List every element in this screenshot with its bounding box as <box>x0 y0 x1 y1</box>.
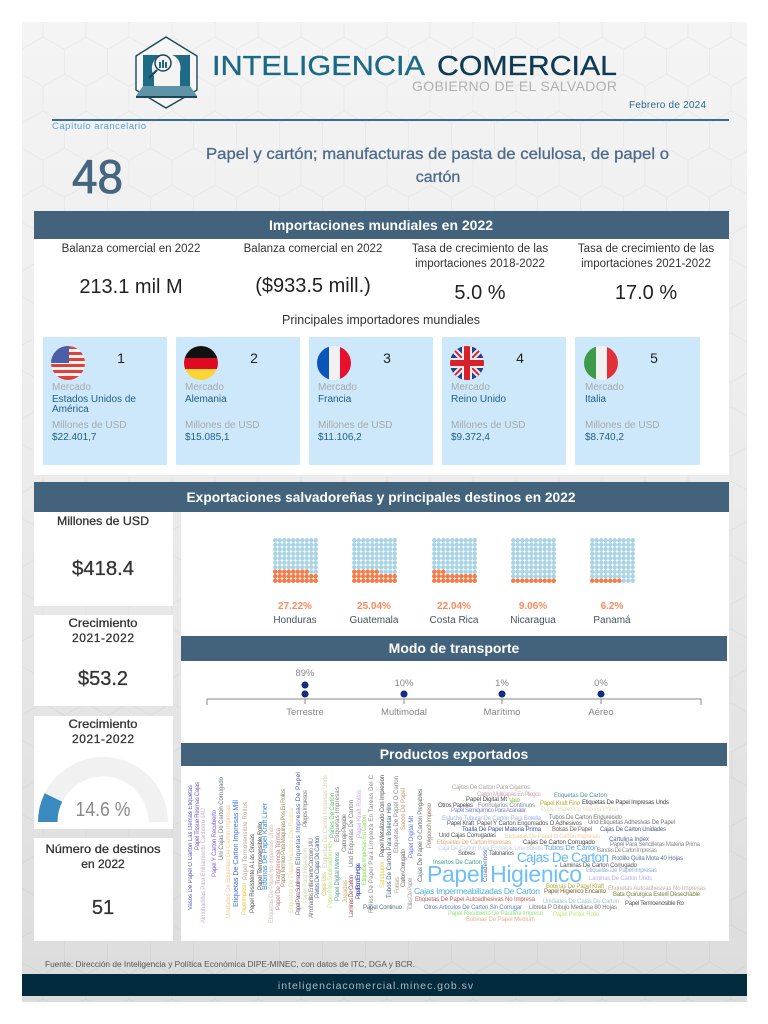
word cloud: productos exportados: Papel Termico Para Maquinas Pos En Rollos <box>281 789 287 887</box>
KPI card: crecimiento $53.2: $53.2 <box>78 668 128 690</box>
card: Italia: Millones de USD <box>585 420 659 431</box>
card: Alemania: $15.085,1 <box>185 432 230 443</box>
card: Estados Unidos: Mercado <box>52 382 91 393</box>
word cloud: productos exportados: Papel Printer Rollo <box>553 912 600 918</box>
word cloud: productos exportados: Papel Para Sencilletas Materia Prima <box>610 842 701 848</box>
card: Francia <box>309 337 433 465</box>
word cloud: productos exportados: Etiquetas De Papel Impresas Unds <box>582 800 669 806</box>
waffle chart: Panamá: 6.2% <box>601 601 624 612</box>
word cloud: productos exportados: Bobinas De Papel Kraft <box>546 884 604 890</box>
word cloud: productos exportados: Papel Semiquimico Para Acanalar <box>451 808 526 814</box>
word cloud: productos exportados: Pliegos Impresos <box>303 790 309 827</box>
dot plot: modo de transporte: 89% <box>295 668 315 679</box>
word cloud: productos exportados: Vaso <box>509 798 521 804</box>
card: Reino Unido: Millones de USD <box>451 420 525 431</box>
word cloud: productos exportados: Carton Corrugado <box>401 848 407 887</box>
word cloud: productos exportados: Estuche Tubular De Carton Para Botella <box>442 816 542 822</box>
card: Estados Unidos: $22.401,7 <box>52 432 97 443</box>
word cloud: productos exportados: Bandas De Carton Impresas <box>597 848 657 854</box>
KPI card: millones de USD: $418.4 <box>72 558 134 580</box>
dot plot: modo de transporte: 10% <box>394 678 414 689</box>
word cloud: productos exportados: Papel Higienico Materia Prima <box>541 807 619 813</box>
KPI: tasa de crecimiento 2021-2022: Tasa de crecimiento de las <box>578 243 714 255</box>
word cloud: productos exportados: Laminas De Carton <box>349 875 355 917</box>
word cloud: productos exportados: Und Etiquetas De Carton <box>349 800 355 867</box>
word cloud: productos exportados: Unidades De Cajas De Carton <box>543 899 619 905</box>
heading band: modo de transporte: Modo de transporte <box>389 640 520 656</box>
KPI card: crecimiento gauge: Crecimiento <box>68 717 138 731</box>
word cloud: productos exportados: Cajas De Carton <box>517 850 609 865</box>
waffle chart: Panamá <box>590 538 635 626</box>
subheading: principales importadores: Principales importadores mundiales <box>282 313 480 327</box>
word cloud: productos exportados: Papel Higienico Encanto <box>544 889 607 895</box>
word cloud: productos exportados: Almohadillas Para Enfriamiento Cachorro 14U <box>201 808 207 923</box>
KPI card: número de destinos <box>34 838 173 941</box>
word cloud: productos exportados: Cajas De Papel O Carton Plegables <box>418 789 424 882</box>
card: Estados Unidos: 1 <box>117 350 125 366</box>
KPI: tasa de crecimiento 2018-2022 <box>412 243 548 304</box>
waffle chart: Panamá: Panamá <box>593 615 631 626</box>
word cloud: productos exportados: Und Cajas Corrugadas <box>439 833 496 839</box>
word cloud: productos exportados: Papel Para Impresion <box>303 848 309 903</box>
word cloud: productos exportados: Papel Tissue Resmas Cajas <box>195 782 201 850</box>
title: Inteligencia Comercial: INTELIGENCIA <box>212 50 425 81</box>
word cloud: productos exportados: Papel Termosensible Rollos <box>243 802 249 880</box>
waffle chart: Costa Rica: 22.04% <box>437 601 471 612</box>
card: Alemania: Alemania <box>185 394 227 405</box>
icon: flag Italy <box>584 346 619 380</box>
word cloud: productos exportados: Etiquetas De Papel Autoadhesivas No Impresa <box>415 897 536 903</box>
word cloud: productos exportados: Unidades De Etiquetas De Carton Impresas <box>226 805 232 918</box>
word cloud: productos exportados: Otros Articulos De Carton Sin Corrugar <box>424 905 522 911</box>
word cloud: productos exportados: Rodillo Quita Mota 40 Hojas <box>612 856 683 862</box>
word cloud: productos exportados: Papel Termosensible Rollo <box>258 821 264 890</box>
waffle chart: Guatemala: Guatemala <box>350 615 399 626</box>
KPI card: crecimiento $53.2: Crecimiento <box>68 616 138 630</box>
word cloud: productos exportados: Etiquetas De Carton Impresas Unds <box>323 775 329 868</box>
chapter title: Papel y cartón; manufacturas de pasta de celulosa, de papel o <box>206 146 669 163</box>
word cloud: productos exportados: Cajas Impermeabilizadas De Carton <box>414 886 540 896</box>
panel: destinos y productos <box>181 512 729 941</box>
waffle chart: Nicaragua: 9.06% <box>519 601 547 612</box>
word cloud: productos exportados: Papel Digital Metros <box>335 852 341 901</box>
word cloud: productos exportados: Partes De Carton <box>330 793 336 838</box>
icon: flag Germany <box>184 346 218 381</box>
word cloud: productos exportados: Etiquetas De Papel No Impresas Unds <box>269 825 275 923</box>
KPI: tasa de crecimiento 2018-2022: 5.0 % <box>454 282 506 304</box>
word cloud: productos exportados: Cajas De Carton Corrugado <box>523 840 596 846</box>
dot plot: modo de transporte: Marítimo <box>484 707 520 718</box>
word cloud: productos exportados: Cajas De Carton Unidades <box>600 827 666 833</box>
dot plot: modo de transporte: 0% <box>594 678 608 689</box>
word cloud: productos exportados: Papel Metalizado Con Impresion <box>380 775 386 857</box>
KPI: tasa de crecimiento 2018-2022: Tasa de crecimiento de las <box>412 243 548 255</box>
word cloud: productos exportados: Etiquetas De Carton Impresas <box>437 840 511 846</box>
word cloud: productos exportados: Etiquetas Impresas <box>335 787 341 842</box>
icon: flag France <box>317 346 352 380</box>
waffle chart: Costa Rica: Costa Rica <box>430 615 479 626</box>
KPI: tasa de crecimiento 2021-2022: 17.0 % <box>615 282 677 304</box>
card: Reino Unido: Reino Unido <box>451 394 506 405</box>
title: Inteligencia Comercial <box>212 50 617 81</box>
waffle chart: Honduras: Honduras <box>273 615 317 626</box>
dot plot: modo de transporte: Multimodal <box>381 707 427 718</box>
card: Estados Unidos <box>43 337 167 465</box>
word cloud: productos exportados: Etiquetas De Papel O Carton <box>394 776 400 853</box>
card: Alemania: Mercado <box>185 382 224 393</box>
word cloud: productos exportados: Polypouch Impreso <box>427 802 433 848</box>
word cloud: productos exportados: Papel Digital Mt <box>409 816 415 858</box>
card: Italia: $8.740,2 <box>585 432 624 443</box>
word cloud: productos exportados: Bata Quirurgica Esteril Desechable <box>613 892 701 898</box>
word cloud: productos exportados: Carton Multicapas En Pliegos <box>477 792 541 798</box>
card: Estados Unidos: América <box>52 404 89 415</box>
word cloud: productos exportados: Bobinas De Papel Kraft Liner <box>262 802 269 890</box>
word cloud: productos exportados: Cartonaje Plegable <box>342 813 348 852</box>
word cloud: productos exportados: Laminas De Carton Unds <box>589 876 652 882</box>
heading band: productos exportados: Productos exportados <box>380 746 528 762</box>
word cloud: productos exportados: Rollos De Papel Para Limpieza En Tareas Del C <box>369 774 375 913</box>
word cloud: productos exportados: Papel Kraft <box>447 821 474 827</box>
KPI: balanza comercial 213.1 mil M <box>62 243 200 298</box>
word cloud: productos exportados: Toalla De Papel Materia Prima <box>462 827 542 833</box>
icon: flag UK <box>450 346 484 380</box>
chapter title <box>206 146 669 186</box>
waffle chart: Guatemala: 25.04% <box>357 601 391 612</box>
title: Inteligencia Comercial: COMERCIAL <box>437 50 617 81</box>
word cloud: productos exportados: Papel Resistente A Las Grasas <box>250 834 256 913</box>
footer bar <box>22 974 747 996</box>
word cloud: productos exportados: Sobres <box>458 851 475 857</box>
word cloud: productos exportados: Und Etiquetas Adhesivas De Papel <box>588 820 675 826</box>
heading band: exportaciones: Exportaciones salvadoreñas y principales destinos en 2022 <box>186 489 576 505</box>
word cloud: productos exportados: Papel Higienico <box>427 861 582 887</box>
card: Italia: 5 <box>650 350 658 366</box>
word cloud: productos exportados: Papel Y Carton Engomados O Adhesivos <box>477 821 582 827</box>
card: Reino Unido: 4 <box>516 350 524 366</box>
card: Francia: $11.106,2 <box>318 432 362 443</box>
waffle chart: Costa Rica <box>430 538 479 626</box>
word cloud: productos exportados <box>188 771 706 923</box>
card: Alemania: 2 <box>250 350 258 366</box>
word cloud: productos exportados: Talonarios <box>489 851 514 857</box>
heading band: importaciones: Importaciones mundiales en 2022 <box>269 217 493 233</box>
word cloud: productos exportados: Papel Kraft Fino <box>540 801 581 807</box>
word cloud: productos exportados: Papel Para Sublimacion Hds <box>328 841 334 908</box>
card: Reino Unido: Mercado <box>451 382 490 393</box>
word cloud: productos exportados: Tubos De Carton Endurecido <box>549 815 623 821</box>
word cloud: productos exportados: Bolsas De Papel <box>552 827 592 833</box>
word cloud: productos exportados: Etiquetas De Papel O Carton Impresas <box>505 834 600 840</box>
dot plot: modo de transporte: Terrestre <box>286 707 324 718</box>
card: Alemania: Millones de USD <box>185 420 259 431</box>
word cloud: productos exportados: Papel Continuo <box>363 905 403 911</box>
KPI card: crecimiento gauge: 2021-2022 <box>72 732 134 746</box>
KPI card: millones de USD <box>34 512 173 606</box>
KPI: tasa de crecimiento 2021-2022: importaciones 2021-2022 <box>581 258 711 270</box>
KPI card: número de destinos: 51 <box>92 897 114 919</box>
word cloud: productos exportados: Papel Bond En Hojas <box>356 863 362 899</box>
word cloud: productos exportados: Formularios Continuos <box>478 803 535 809</box>
word cloud: productos exportados: Almohadillas Enfriamiento Cachorro 14U <box>309 838 315 918</box>
word cloud: productos exportados: Etiquetas Impresas De Papel <box>295 771 302 865</box>
KPI card: número de destinos: en 2022 <box>81 857 125 871</box>
word cloud: productos exportados: Jugadas <box>343 880 349 903</box>
KPI card: crecimiento gauge <box>34 716 173 829</box>
word cloud: productos exportados: Sandpaper <box>380 861 386 888</box>
KPI: balanza comercial 213.1 mil M: 213.1 mil M <box>79 276 183 298</box>
KPI: balanza comercial ($933.5 mill.) <box>244 243 382 297</box>
word cloud: productos exportados: Papel De Transferencia Termica <box>276 827 282 910</box>
date: Febrero de 2024 <box>629 100 706 111</box>
KPI card: crecimiento $53.2: 2021-2022 <box>72 631 134 645</box>
word cloud: productos exportados: Cajas Uss <box>322 872 328 896</box>
word cloud: productos exportados: Cajitas De Carton Para Cigarros <box>452 785 530 791</box>
card: Estados Unidos: Millones de USD <box>52 420 126 431</box>
icon: logo hexagon with laptop <box>136 37 197 108</box>
word cloud: productos exportados: Etiquetas De Carton Impresas Mill <box>233 800 240 907</box>
card: Reino Unido: $9.372,4 <box>451 432 490 443</box>
heading band: productos exportados <box>181 743 727 766</box>
waffle chart: Nicaragua <box>510 538 556 626</box>
chapter number: 48 <box>72 150 123 203</box>
card: Alemania <box>176 337 300 465</box>
word cloud: productos exportados: Etiquetas De Papel Impresas <box>586 868 657 874</box>
word cloud: productos exportados: Laminas De Carton Corrugado <box>560 863 638 869</box>
word cloud: productos exportados: Vasos De Papel O Carton Las Demas Etiquetas <box>188 785 194 910</box>
word cloud: productos exportados: Tollas De Papel <box>408 878 414 910</box>
word cloud: productos exportados: Foldars <box>395 877 401 893</box>
word cloud: productos exportados: Caja De Carton Para Empacar Una Botella <box>438 846 544 852</box>
waffle chart: Honduras: 27.22% <box>278 601 312 612</box>
KPI card: número de destinos: Número de destinos <box>46 842 160 856</box>
word cloud: productos exportados: Etiquetas Autoadhesivas No Impresas <box>608 886 706 892</box>
word cloud: productos exportados: Papel Para Sublimacion <box>296 867 302 915</box>
card: Francia: Francia <box>318 394 352 405</box>
chapter title: cartón <box>416 169 460 186</box>
word cloud: productos exportados: Etiquetas Impresas En Carton <box>362 815 368 885</box>
subtitle: Gobierno de El Salvador: GOBIERNO DE EL SALVADOR <box>412 78 617 94</box>
word cloud: productos exportados: Otros Papeles <box>438 803 473 809</box>
word cloud: productos exportados: Papel Termoenosible Ro <box>625 901 685 907</box>
word cloud: productos exportados: Partes De Cajas De Carton <box>315 836 321 898</box>
dot plot: modo de transporte <box>207 668 701 718</box>
source note: Fuente: Dirección de Inteligencia y Política Económica DIPE-MINEC, con datos de ITC, DGA y BCR. <box>45 959 415 969</box>
dot plot: modo de transporte: Aéreo <box>588 707 614 718</box>
word cloud: productos exportados: Uni Cajas De Carton Corrugado <box>219 776 225 860</box>
waffle chart: Nicaragua: Nicaragua <box>510 615 556 626</box>
card: Francia: Mercado <box>318 382 357 393</box>
word cloud: productos exportados: Etiquetas De Papel Impreso Con Resina <box>289 807 295 913</box>
card: Italia: Italia <box>585 394 607 405</box>
KPI: balanza comercial ($933.5 mill.): ($933.5 mill.) <box>255 275 371 297</box>
footer bar: inteligenciacomercial.minec.gob.sv <box>278 980 474 992</box>
KPI card: crecimiento gauge: 14.6 % <box>76 799 131 821</box>
KPI: tasa de crecimiento 2018-2022: importaciones 2018-2022 <box>415 258 545 270</box>
word cloud: productos exportados: Bobinas De Papel Medium <box>466 917 535 923</box>
word cloud: productos exportados: Cartulina Index <box>609 837 649 843</box>
word cloud: productos exportados: Sacos De Papel <box>401 788 407 830</box>
word cloud: productos exportados: Etiquetas De Carton <box>554 793 607 799</box>
heading band: importaciones <box>34 211 729 239</box>
heading band: exportaciones <box>34 482 729 512</box>
card: Francia: 3 <box>383 350 391 366</box>
KPI: balanza comercial ($933.5 mill.): Balanza comercial en 2022 <box>244 243 382 255</box>
word cloud: productos exportados: Papel Y Carton Recubierto <box>212 809 218 877</box>
waffle chart: Guatemala <box>350 538 399 626</box>
waffle chart: Honduras <box>273 538 318 626</box>
header rule <box>52 119 729 121</box>
gauge chart <box>38 757 168 822</box>
word cloud: productos exportados: Tubos De Carton Para Bolletar Hilo <box>387 802 393 898</box>
KPI card: millones de USD: Millones de USD <box>57 514 149 528</box>
word cloud: productos exportados: Cuadernos <box>483 850 489 882</box>
icon: flag USA <box>51 346 85 380</box>
card: Italia: Mercado <box>585 382 624 393</box>
card: Reino Unido <box>442 337 566 465</box>
word cloud: productos exportados: Papel Impreso <box>242 882 248 915</box>
panel: importaciones mundiales <box>34 211 729 475</box>
word cloud: productos exportados: Tubos De Carton <box>544 843 598 852</box>
word cloud: productos exportados: Papel Digital Mt <box>466 797 507 803</box>
card: Italia <box>575 337 700 465</box>
KPI: balanza comercial 213.1 mil M: Balanza comercial en 2022 <box>62 243 200 255</box>
KPI: tasa de crecimiento 2021-2022 <box>578 243 714 304</box>
card: Francia: Millones de USD <box>318 420 392 431</box>
word cloud: productos exportados: Insertos De Carton <box>433 860 482 866</box>
label: capítulo arancelario: Capítulo arancelario <box>52 121 146 132</box>
word cloud: productos exportados: Papel Kraft Rollos <box>357 790 363 838</box>
heading band: modo de transporte <box>181 636 727 661</box>
card: Estados Unidos: Estados Unidos de <box>52 394 136 405</box>
dot plot: modo de transporte: 1% <box>495 678 509 689</box>
word cloud: productos exportados: Libreta P Dibujo Mediana 80 Hojas <box>529 905 617 911</box>
word cloud: productos exportados: Papel Recubierto De Parafina Impreso <box>448 911 544 917</box>
KPI card: crecimiento $53.2 <box>34 615 173 706</box>
